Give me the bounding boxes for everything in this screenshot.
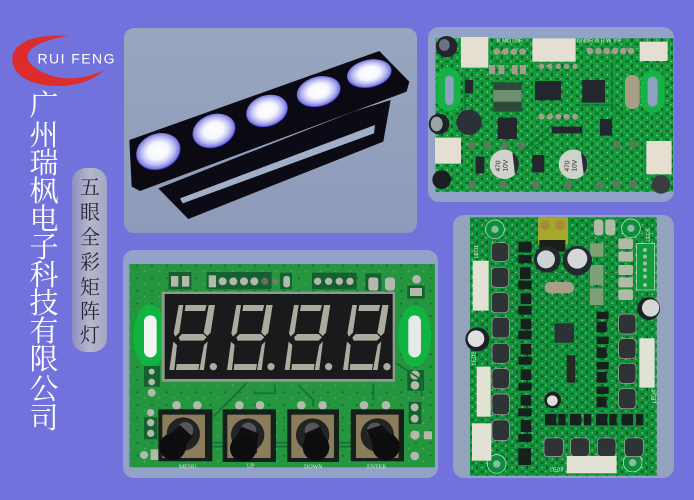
company name vertical text: 限 — [29, 344, 59, 376]
company name vertical text: 电 — [29, 203, 59, 236]
lamp head — [129, 51, 409, 191]
lamp bracket — [158, 100, 391, 219]
capacitors — [465, 246, 660, 408]
button labels: ENTER — [367, 464, 386, 470]
panel: control board — [428, 27, 674, 202]
board silkscreen labels: LED2 — [471, 352, 477, 365]
crystal — [625, 75, 640, 109]
seven segment display — [162, 292, 395, 382]
capacitors: 10V — [502, 159, 510, 172]
solder pads — [144, 272, 425, 439]
board silkscreen labels: LED5 — [646, 228, 652, 242]
push buttons — [158, 409, 404, 462]
company name vertical text: 州 — [29, 120, 59, 152]
connectors — [472, 261, 655, 473]
logo: Rui Feng: RUI FENG — [38, 50, 114, 66]
product name tag — [72, 168, 107, 352]
panel: driver board — [453, 215, 674, 478]
mounting slots — [436, 68, 664, 113]
board silkscreen labels — [497, 38, 622, 44]
bracket slot — [180, 125, 375, 203]
capacitors: 470 — [495, 160, 502, 172]
traces — [465, 62, 625, 152]
button labels — [179, 463, 386, 470]
company name vertical text: 枫 — [29, 175, 59, 208]
green circuit board — [470, 217, 657, 476]
product name tag: 彩 — [80, 251, 100, 274]
silver pads — [590, 219, 655, 305]
product name tag: 阵 — [80, 300, 100, 323]
capacitors — [429, 36, 670, 194]
capacitors: 470 — [564, 160, 571, 172]
product name tag: 全 — [80, 226, 100, 249]
button labels: MENU — [179, 464, 197, 470]
company name vertical text: 子 — [29, 232, 59, 264]
panel: display board — [123, 250, 438, 478]
pin headers — [489, 48, 634, 120]
board silkscreen labels: LED1 — [474, 245, 480, 258]
green circuit board — [129, 264, 435, 467]
board silkscreen labels — [471, 228, 657, 473]
connectors — [435, 37, 672, 174]
board silkscreen labels: LED3 — [550, 467, 563, 473]
company name vertical text: 科 — [29, 259, 59, 292]
button labels: UP — [247, 463, 255, 469]
terminal block — [538, 217, 568, 252]
company name vertical text: 瑞 — [29, 147, 59, 180]
company name vertical text — [29, 89, 59, 435]
company name vertical text: 有 — [29, 315, 59, 348]
product name tag: 五 — [80, 177, 100, 199]
board silkscreen labels: LED4 — [651, 390, 657, 403]
company name vertical text: 广 — [29, 89, 59, 122]
company name vertical text: 司 — [29, 403, 59, 435]
product name tag: 矩 — [80, 276, 100, 299]
logo: Rui Feng — [12, 36, 115, 86]
button labels: DOWN — [304, 464, 323, 470]
mounting slots — [133, 304, 431, 368]
lamp lenses — [131, 55, 394, 176]
board silkscreen labels: GNDR G B W Y P — [577, 38, 622, 44]
transistors and chips — [518, 242, 643, 465]
mounting holes — [486, 219, 642, 473]
green circuit board — [436, 38, 673, 192]
company name vertical text: 公 — [29, 374, 59, 406]
capacitors: 10V — [571, 159, 579, 172]
board silkscreen labels: X MOTOR — [497, 38, 523, 44]
company name vertical text: 技 — [29, 287, 59, 320]
crystal — [545, 282, 574, 293]
traces — [213, 363, 422, 447]
product name tag: 灯 — [80, 324, 100, 347]
product name tag: 眼 — [80, 201, 100, 224]
panel: LED matrix light — [124, 28, 417, 233]
inductors — [491, 243, 643, 457]
chips — [465, 80, 612, 173]
